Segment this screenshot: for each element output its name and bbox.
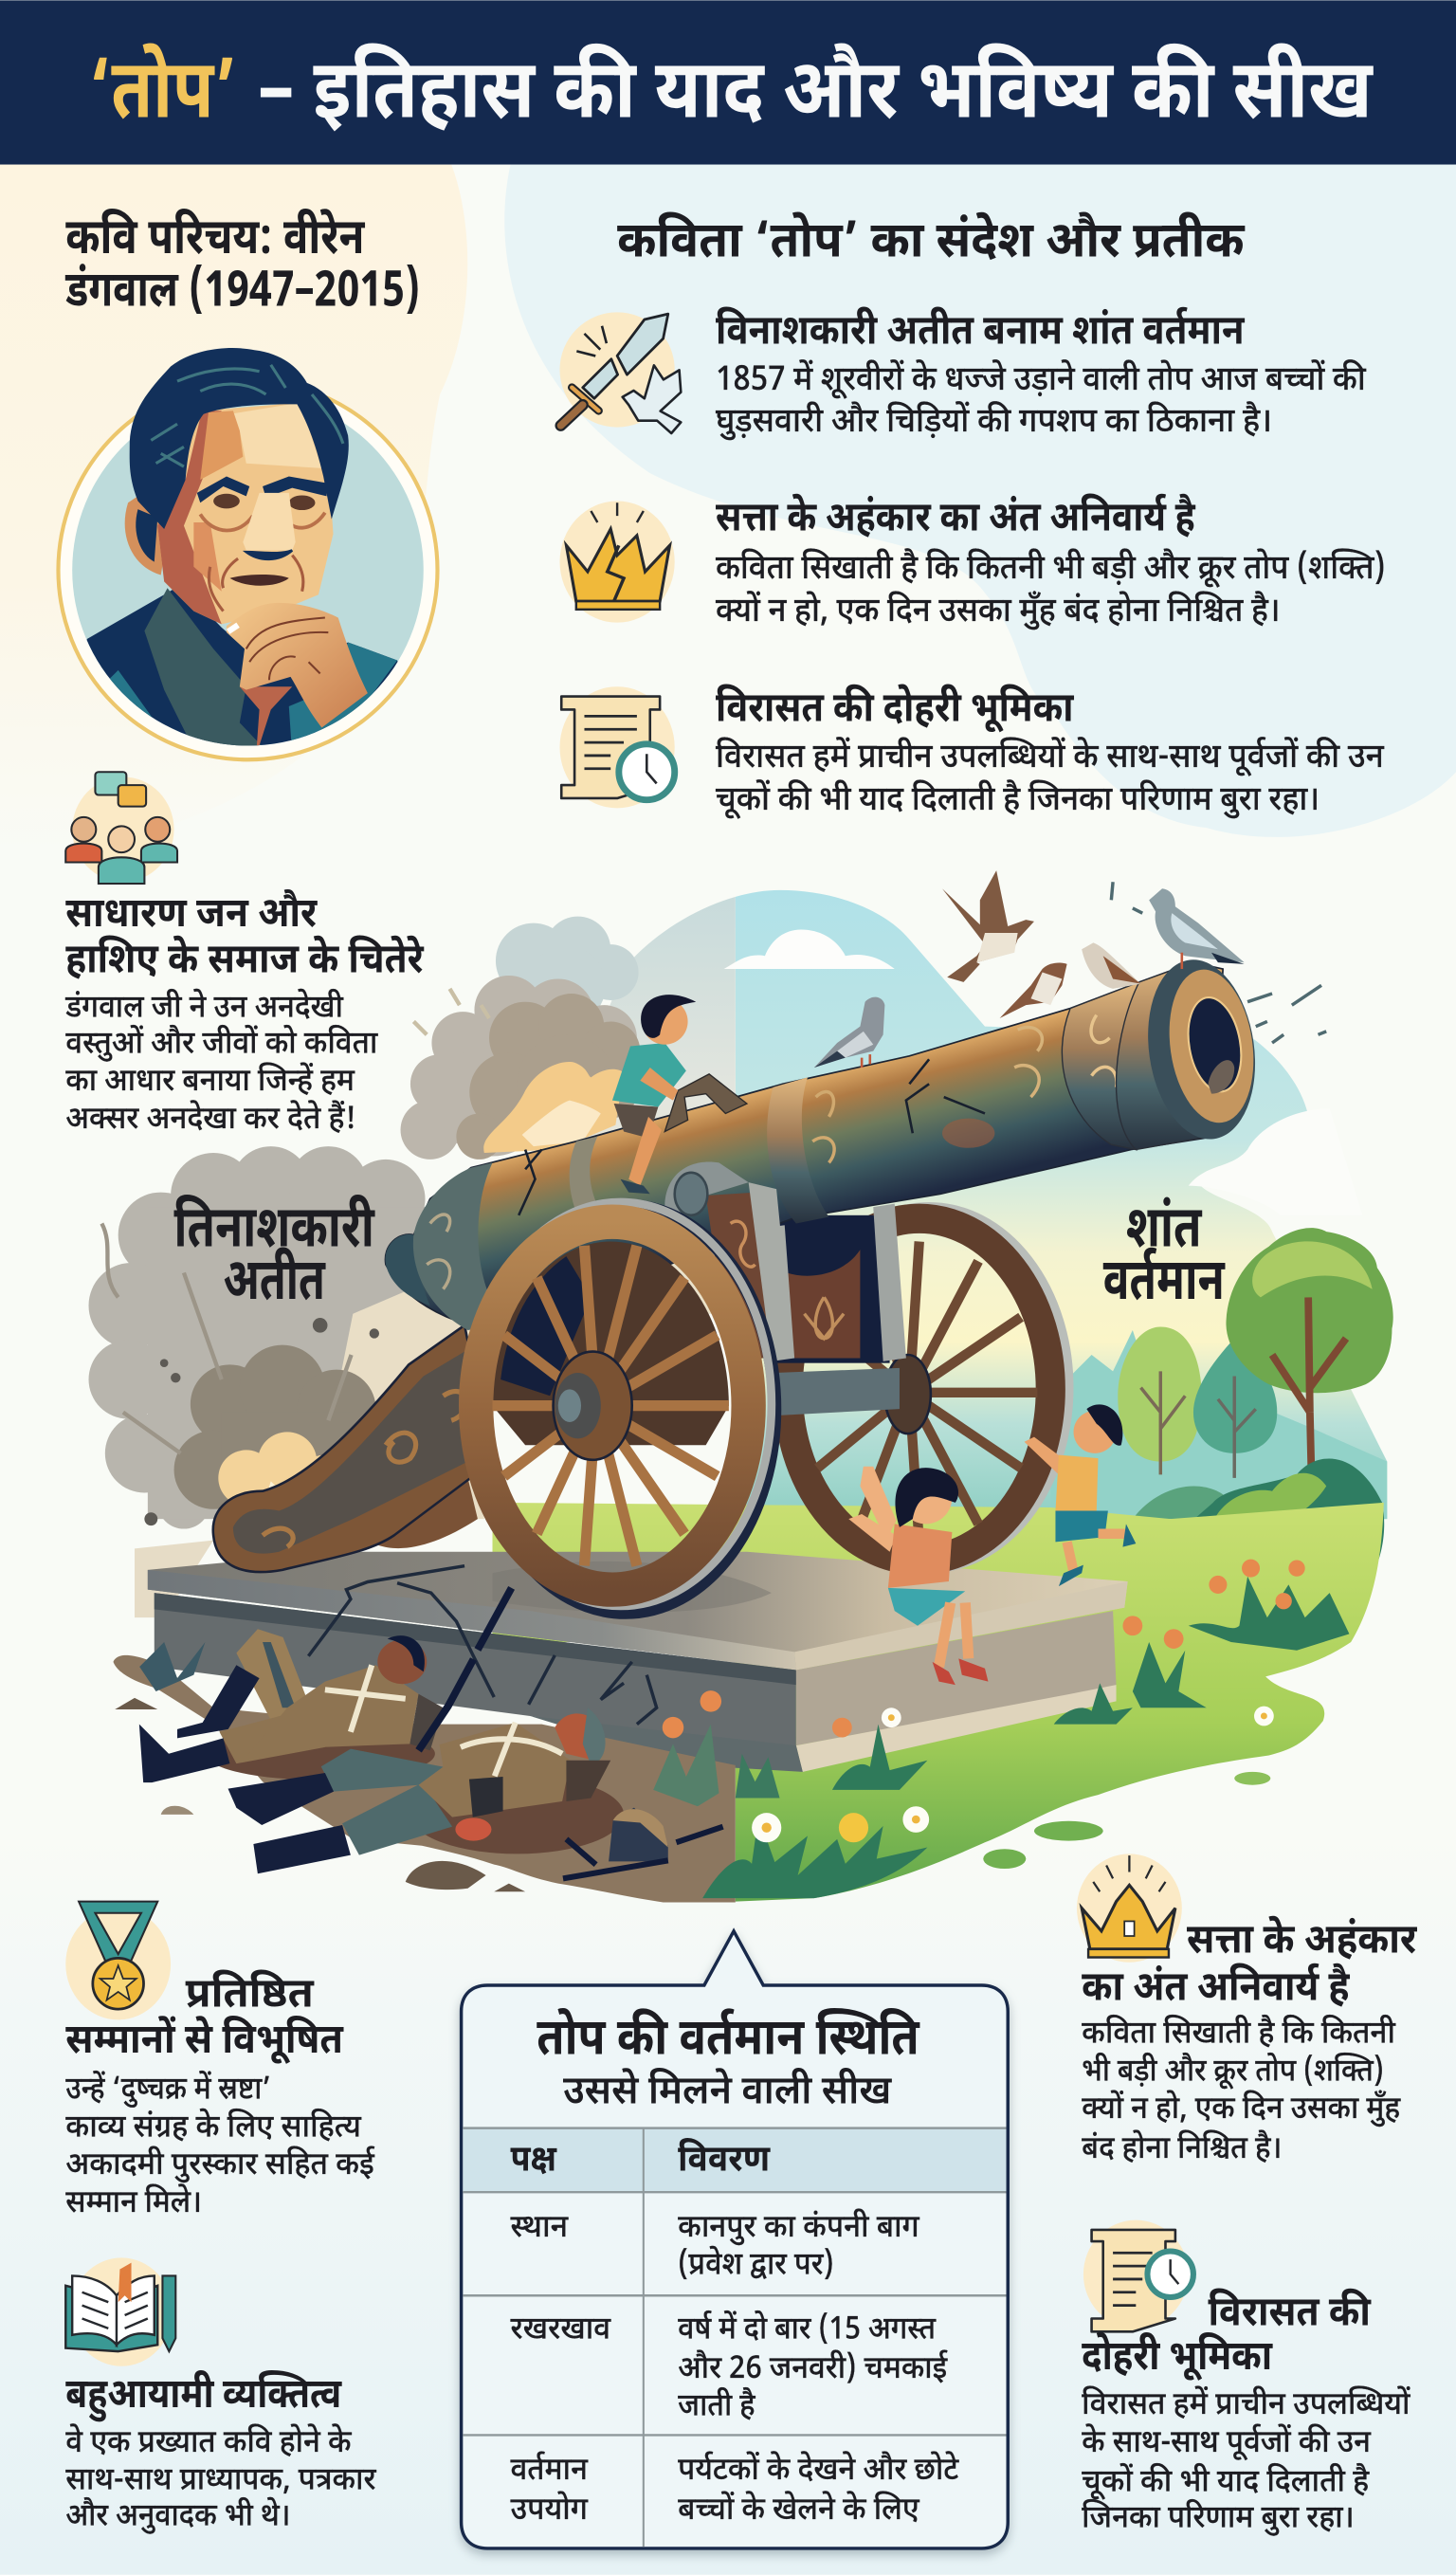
table row: maintenance: जाती है <box>678 2387 756 2429</box>
panel: common people <box>64 772 425 1141</box>
text block: personality: बहुआयामी व्यक्तित्व <box>65 2370 342 2424</box>
illustration: cannon scene <box>89 870 1393 1903</box>
text block: end of arrogance of power: सत्ता के अहंकार का अंत अनिवार्य है <box>716 494 1196 548</box>
table row: present use: पर्यटकों के देखने और छोटे <box>678 2451 959 2493</box>
text block: honours: सम्मान मिले। <box>65 2183 202 2225</box>
heading: poet name <box>64 209 420 326</box>
table row: maintenance: रखरखाव <box>511 2311 611 2351</box>
title bar <box>0 0 1456 165</box>
text block: dual role of heritage: विरासत हमें प्राचीन उपलब्धियों के साथ-साथ पूर्वजों की उन <box>716 737 1384 781</box>
stone pedestal <box>135 1541 1128 1772</box>
table heading: तोप की वर्तमान स्थिति <box>537 2008 920 2075</box>
text block: dual role of heritage <box>716 685 1384 824</box>
front wheel <box>469 1202 774 1613</box>
text block: honours: उन्हें ‘दुष्चक्र में स्रष्टा’ <box>65 2070 271 2111</box>
trees and park <box>1050 1228 1393 1563</box>
text block: destructive past vs calm present: विनाशकारी अतीत बनाम शांत वर्तमान <box>716 306 1246 360</box>
text block: personality <box>65 2370 377 2539</box>
soldiers <box>115 1588 723 1891</box>
text block: painter of common people: का आधार बनाया जिन्हें हम <box>65 1062 355 1104</box>
text block: painter of common people: अक्सर अनदेखा कर देते हैं! <box>65 1100 356 1141</box>
table row: present use: उपयोग <box>511 2491 589 2532</box>
text block: painter of common people <box>64 889 425 1141</box>
text block: painter of common people: हाशिए के समाज के चितेरे <box>65 936 425 990</box>
text block: destructive past vs calm present <box>716 306 1367 446</box>
label: destructive past: अतीत <box>224 1247 326 1323</box>
text block: destructive past vs calm present: घुड़सवारी और चिड़ियों की गपशप का ठिकाना है। <box>716 401 1272 446</box>
table heading <box>537 2008 920 2120</box>
text block: dual role of heritage: विरासत की दोहरी भूमिका <box>716 685 1075 739</box>
table row: maintenance: वर्ष में दो बार (15 अगस्त <box>678 2310 937 2351</box>
text block: personality: वे एक प्रख्यात कवि होने के <box>65 2423 353 2465</box>
dirt ground <box>113 1655 736 1903</box>
label: calm present: वर्तमान <box>1103 1247 1226 1323</box>
table row: location: स्थान <box>511 2210 569 2250</box>
text block: heritage: चूकों की भी याद दिलाती है <box>1082 2462 1370 2504</box>
label: calm present: शांत <box>1126 1196 1203 1270</box>
text block: end of arrogance: भी बड़ी और क्रूर तोप (शक्ति) <box>1082 2052 1384 2093</box>
green ground <box>493 1503 1384 1902</box>
carriage front plate <box>664 1161 792 1363</box>
table row: location <box>511 2208 920 2288</box>
icon: crown with rays <box>1077 1854 1182 1963</box>
table row: present use <box>511 2451 959 2532</box>
text block: painter of common people: वस्तुओं और जीवों को कविता <box>65 1024 378 1066</box>
text block: end of arrogance: कविता सिखाती है कि कितनी <box>1082 2015 1396 2056</box>
table row: present use: बच्चों के खेलने के लिए <box>678 2491 920 2532</box>
text block: end of arrogance of power: कविता सिखाती है कि कितनी भी बड़ी और क्रूर तोप (शक्ति) <box>716 548 1386 593</box>
panel: poet introduction <box>58 209 437 759</box>
label: destructive past <box>174 1195 375 1323</box>
table header row: पक्ष <box>511 2139 557 2186</box>
panel: end of arrogance (right) <box>1077 1854 1417 2171</box>
text block: personality: और अनुवादक भी थे। <box>65 2497 291 2539</box>
text block: painter of common people: डंगवाल जी ने उन अनदेखी <box>64 988 344 1030</box>
table row: location: (प्रवेश द्वार पर) <box>678 2246 834 2288</box>
text block: dual role of heritage: चूकों की भी याद दिलाती है जिनका परिणाम बुरा रहा। <box>716 779 1320 824</box>
text block: honours: अकादमी पुरस्कार सहित कई <box>65 2146 375 2187</box>
text block: end of arrogance: बंद होना निश्चित है। <box>1082 2129 1282 2171</box>
text block: heritage: जिनका परिणाम बुरा रहा। <box>1082 2498 1355 2540</box>
text block: heritage: विरासत हमें प्राचीन उपलब्धियों <box>1082 2385 1411 2427</box>
panel: poem message and symbols <box>560 212 1386 824</box>
text block: heritage: विरासत की <box>1209 2288 1372 2342</box>
heading: poet name: कवि परिचय: वीरेन <box>65 209 365 274</box>
text block: honours: काव्य संग्रह के लिए साहित्य <box>65 2108 362 2149</box>
text block: painter of common people: साधारण जन और <box>65 889 318 943</box>
flowers and foreground grass <box>653 1560 1349 1898</box>
carriage rear plate and axle <box>761 1204 906 1415</box>
table heading: उससे मिलने वाली सीख <box>563 2068 893 2120</box>
smoke: left of barrel <box>401 917 640 1160</box>
cannon carriage trail <box>213 1325 493 1572</box>
title bar: ‘तोप’ <box>89 43 236 151</box>
sky and background <box>586 889 1388 1519</box>
label: calm present <box>1103 1196 1226 1323</box>
portrait of poet <box>58 348 437 759</box>
text block: heritage: के साथ-साथ पूर्वजों की उन <box>1082 2423 1372 2465</box>
smoke: left explosion <box>89 1146 484 1535</box>
table grid <box>463 2128 1007 2547</box>
panel: multi-faceted personality <box>65 2257 377 2539</box>
icon: sword and dove <box>560 312 681 433</box>
heading: message: कविता ‘तोप’ का संदेश और प्रतीक <box>617 212 1245 278</box>
text block: end of arrogance of power: क्यों न हो, एक दिन उसका मुँह बंद होना निश्चित है। <box>716 591 1281 635</box>
boy by wheel <box>1025 1404 1136 1586</box>
icon: open book and pen <box>65 2257 175 2366</box>
table row: maintenance <box>511 2310 948 2429</box>
girl sitting on pedestal <box>848 1467 988 1685</box>
text block: honours: प्रतिष्ठित <box>186 1969 315 2023</box>
text block: heritage <box>1082 2288 1411 2540</box>
text block: honours: सम्मानों से विभूषित <box>65 2016 344 2070</box>
table header row <box>511 2138 771 2186</box>
text block: end of arrogance <box>1082 1915 1417 2171</box>
panel: heritage (right) <box>1082 2220 1411 2540</box>
text block: honours <box>65 1969 375 2225</box>
icon: medal <box>65 1902 171 2019</box>
table header row: विवरण <box>678 2138 771 2186</box>
heading: poet name: डंगवाल (1947–2015) <box>64 262 420 326</box>
pigeon on barrel <box>814 997 884 1068</box>
text block: end of arrogance: क्यों न हो, एक दिन उसका मुँह <box>1082 2089 1401 2131</box>
icon: group of people <box>65 772 177 884</box>
table row: location: कानपुर का कंपनी बाग <box>678 2208 920 2250</box>
boy on barrel <box>612 995 747 1194</box>
text block: destructive past vs calm present: 1857 में शूरवीरों के धज्जे उड़ाने वाली तोप आज बच्चों की <box>716 359 1367 404</box>
birds on muzzle <box>942 870 1326 1043</box>
panel: current status table <box>462 1931 1008 2548</box>
text block: end of arrogance of power <box>716 494 1386 635</box>
panel: honours <box>65 1902 375 2225</box>
icon: scroll with clock <box>1083 2220 1193 2331</box>
icon: broken crown <box>560 502 675 623</box>
label: destructive past: तिनाशकारी <box>174 1195 375 1270</box>
callout box with pointer <box>462 1931 1008 2548</box>
text block: end of arrogance: का अंत अनिवार्य है <box>1082 1963 1351 2018</box>
table row: maintenance: और 26 जनवरी) चमकाई <box>678 2349 948 2391</box>
text block: heritage: दोहरी भूमिका <box>1082 2332 1273 2386</box>
rear wheel <box>788 1207 1068 1568</box>
table row: present use: वर्तमान <box>511 2451 589 2493</box>
text block: end of arrogance: सत्ता के अहंकार <box>1187 1915 1417 1969</box>
cannon barrel <box>385 953 1266 1330</box>
icon: scroll and clock <box>560 686 675 808</box>
text block: personality: साथ-साथ प्राध्यापक, पत्रकार <box>65 2463 377 2503</box>
